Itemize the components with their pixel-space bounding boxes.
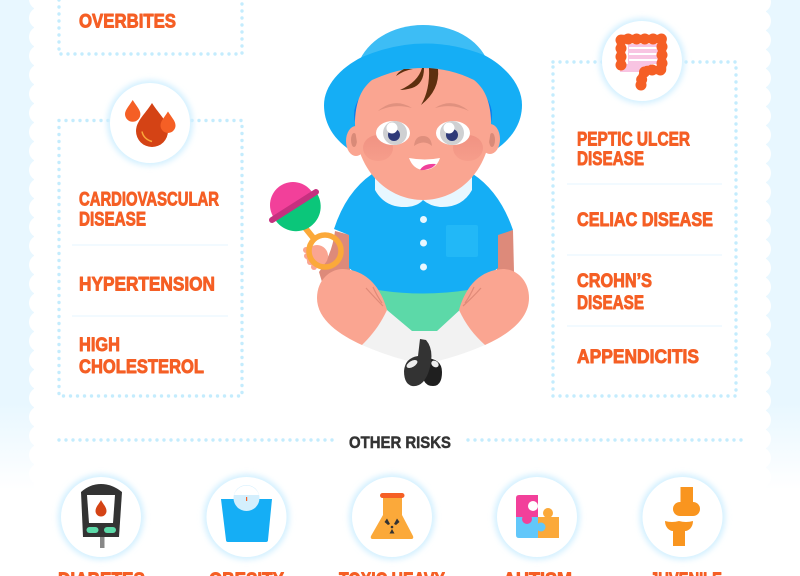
heading: other risks: OTHER RISKS: [349, 433, 451, 452]
eyebrows: [378, 103, 469, 111]
head: [355, 68, 491, 200]
panel: cardiovascular risks: DISEASE: [79, 208, 146, 230]
item: toxic heavy metals: [339, 474, 445, 576]
icon: flask: [371, 493, 413, 539]
label: high cholesterol: HIGH: [79, 334, 120, 356]
shirt collar: [375, 175, 472, 207]
nose: [414, 136, 432, 146]
item: juvenile arthritis: [640, 474, 726, 576]
arms: [319, 230, 514, 282]
label: overbites: OVERBITES: [79, 10, 176, 32]
hat: [324, 25, 522, 159]
label: appendicitis: APPENDICITIS: [577, 346, 699, 368]
panel: digestive risks: [553, 18, 736, 396]
right leg: [459, 269, 529, 345]
ears: [346, 124, 500, 156]
icon: glucose meter: [81, 484, 122, 548]
knee creases: [366, 287, 481, 306]
icon: blood drops: [107, 80, 193, 166]
label: celiac disease: CELIAC DISEASE: [577, 209, 713, 231]
label: hypertension: HYPERTENSION: [79, 274, 215, 296]
label: crohn's disease: CROHN’S: [577, 270, 652, 292]
illustration: baby with rattle: [270, 25, 529, 386]
label: cardiovascular disease: CARDIOVASCULAR: [79, 188, 219, 210]
icon: knee joint: [665, 487, 700, 546]
icon: puzzle: [516, 495, 559, 538]
panel: digestive risks: DISEASE: [577, 292, 644, 314]
item: obesity: [204, 474, 290, 576]
hair: [396, 68, 438, 105]
diaper: [378, 290, 468, 331]
socks: [362, 310, 485, 361]
rattle: [270, 182, 341, 270]
hand: [303, 245, 328, 270]
icon: scale: [221, 485, 272, 542]
right eye: [436, 121, 470, 145]
shirt pocket: [446, 225, 478, 257]
left eye: [376, 121, 410, 145]
mouth: [409, 158, 440, 170]
left leg: [317, 269, 387, 345]
panel: cardiovascular risks: CHOLESTEROL: [79, 356, 204, 378]
shirt: [334, 174, 513, 294]
cheeks: [363, 135, 483, 161]
icon: intestines: [599, 18, 685, 104]
shoes: [404, 339, 442, 386]
item: autism: [494, 474, 580, 576]
item: diabetes: [58, 474, 145, 576]
shirt buttons: [420, 216, 427, 270]
panel: digestive risks: DISEASE: [577, 148, 644, 170]
panel: top-left list remainder: [59, 0, 242, 54]
label: peptic ulcer disease: PEPTIC ULCER: [577, 128, 690, 150]
panel: cardiovascular risks: [59, 80, 242, 396]
